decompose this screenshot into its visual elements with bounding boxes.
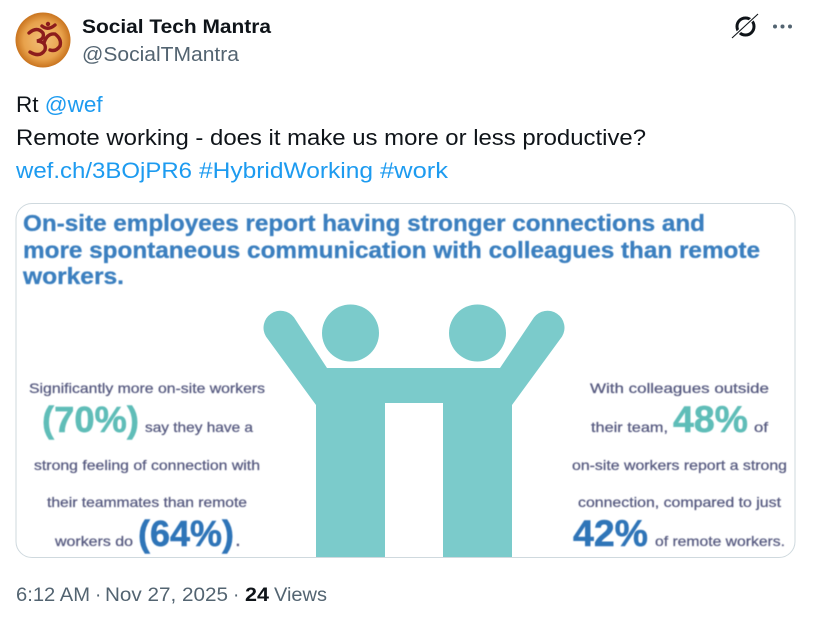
text block: outside-team connection stat: on-site workers report a strong [572,457,787,473]
timestamp and views: · [233,585,239,606]
timestamp and views: 6:12 AM [16,585,90,606]
timestamp and views: Nov 27, 2025 [105,585,228,606]
tweet text: Rt @wef [16,92,103,117]
heading: workers. [22,263,124,289]
heading: more spontaneous communication with colleagues than remote [23,237,760,263]
text block: on-site connection stat: (70%) [42,399,139,440]
tweet text: wef.ch/3BOjPR6 [15,158,192,183]
text block: on-site connection stat: strong feeling of connection with [34,457,260,473]
text block: outside-team connection stat: 48% [673,399,748,440]
tweet text [15,92,646,183]
tweet text: #HybridWorking [199,158,373,183]
author name: Social Tech Mantra [82,16,271,38]
text block: outside-team connection stat: of remote workers. [655,533,785,549]
text block: outside-team connection stat: With colleagues outside [590,380,769,396]
timestamp and views: 24 [245,585,269,606]
text block: outside-team connection stat: connection, compared to just [578,494,781,510]
text block: on-site connection stat: say they have a [145,419,253,435]
timestamp and views: Views [274,585,327,606]
text block: outside-team connection stat [572,380,787,554]
timestamp and views [16,585,327,606]
author handle: @SocialTMantra [82,44,240,66]
text block: on-site connection stat: (64%) [138,513,234,554]
text block: on-site connection stat: Significantly more on-site workers [29,380,265,396]
timestamp and views: · [95,585,101,606]
icon: grok slashed circle [732,14,758,38]
heading [22,210,760,289]
text block: outside-team connection stat: 42% [573,513,648,554]
icon: more menu dots [773,24,792,28]
heading: On-site employees report having stronger connections and [23,210,705,236]
panel: infographic card [16,204,795,558]
text block: on-site connection stat [29,380,265,554]
icon: two people with raised arms [264,304,564,557]
text block: outside-team connection stat: of [754,419,768,435]
tweet text: #work [380,158,449,183]
text block: on-site connection stat: their teammates than remote [47,494,247,510]
text block: on-site connection stat: workers do [54,533,133,549]
text block: outside-team connection stat: their team, [591,419,668,435]
text block: on-site connection stat: . [236,533,240,549]
tweet text: Remote working - does it make us more or less productive? [16,125,646,150]
icon: avatar om symbol [16,12,70,68]
